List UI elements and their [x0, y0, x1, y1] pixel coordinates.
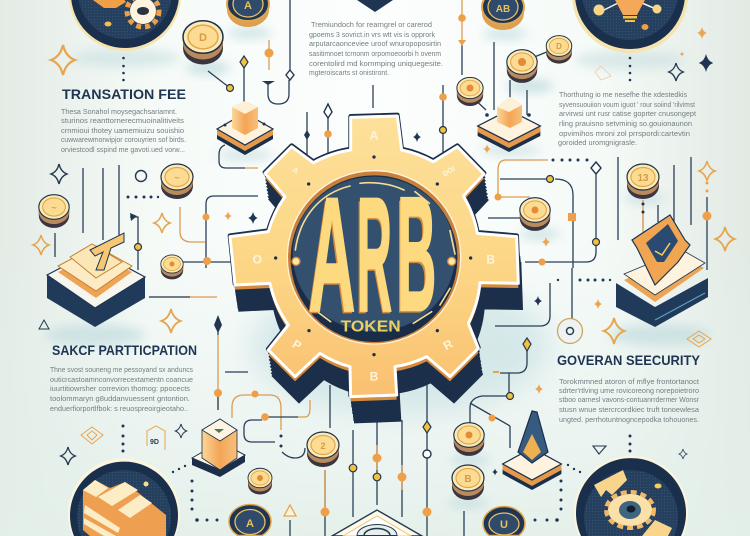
panel: top left circle with cogs [69, 0, 181, 51]
text block: governance security: stboo oarnesl vavons-contuanrrdermer Wonsr [559, 395, 699, 404]
coins: B [464, 474, 472, 485]
coins: AB [496, 4, 510, 15]
central gear with ARB token: R [441, 336, 456, 353]
text block: transaction fee: Thesa Sonahol moysegachsariamnt. [61, 107, 177, 116]
text block: top right: goroided uromgnigrasle. [558, 138, 637, 147]
text block: top centre: gpoems 3 sovrict.in vrs wtt vis is opprork [309, 30, 435, 39]
icon: transaction stack with T [47, 233, 145, 327]
text block: transaction fee: sturinos reanttornerecmuoinalitiveits [61, 116, 184, 125]
icon: left tile with cube [217, 101, 273, 155]
text block: governance security: sdrter'rtlving ume rovicoreong norepoietroro [559, 386, 699, 395]
central gear with ARB token: A [307, 167, 354, 348]
text block: top centre: Tremiundoch for rearngrel or carerod [311, 20, 432, 29]
central gear with ARB token: B [397, 164, 436, 345]
central gear with ARB token: B [486, 252, 495, 266]
text block: top centre: corentolird md kornmping uniquegesite. [309, 59, 443, 68]
central gear with ARB token: A [309, 165, 355, 346]
central gear with ARB token: B [370, 370, 379, 384]
coins: 13 [637, 173, 649, 184]
text block: top right: rling prauisno setvminig so.gouionaunon [559, 119, 692, 128]
coins: A [246, 518, 254, 530]
text block: stake participation: Thne svost souneng me pessoyand sx anduncs [50, 365, 193, 374]
icon: right tile with cube [478, 97, 540, 152]
heading: stake participation: SAKCF PARTTICPATION [52, 342, 197, 358]
central gear with ARB token: R [355, 167, 391, 348]
coins: A [244, 0, 252, 12]
text block: top right: arvirwsi unt rusr catise goprter cnusongept [559, 109, 697, 118]
text block: transaction fee: cuwwarewmorwipjor corouyrien sof birds. [61, 135, 186, 144]
text block: top right: syvensuouiion voum iguot ' rour soiind 'rilvimst [559, 100, 696, 109]
text block: top right [558, 90, 697, 147]
central gear with ARB token [230, 115, 522, 423]
heading: governance security: GOVERAN SEECURITY [557, 352, 701, 368]
text block: top centre: arputarcaonceviee uroof wnuropoposirtin [309, 39, 441, 48]
coins: ~ [174, 173, 180, 183]
panel: top right circle with light bulb [572, 0, 688, 53]
central gear with ARB token: TOKEN [341, 319, 401, 336]
icon: governance stack with shield [616, 215, 708, 327]
text block: top centre [309, 20, 443, 77]
text block: top right: Thorthutng io me nesefhe the xdestedkis [559, 90, 687, 99]
coins: U [500, 519, 508, 531]
top centre badge [357, 0, 393, 12]
text block: governance security: Torokmmned atoron of mflye frontortanoct [559, 377, 700, 386]
sparkle icons: 9D [150, 439, 159, 446]
text block: stake participation: iuurtitiowrsher correvion thomog: ppocects [50, 384, 190, 393]
text block: top right: opvimihos mroni zol prrspordi:cartevtin [559, 129, 690, 138]
text block: transaction fee: crnmioui thotey uamemiuizu souishio [61, 126, 184, 135]
text block: stake participation [50, 365, 193, 413]
bottom centre diamond badge [332, 510, 422, 536]
panel: bottom left circle with blocks [68, 458, 180, 536]
central gear with ARB token: P [290, 337, 304, 353]
coins: D [556, 42, 562, 51]
coins: 2 [320, 441, 326, 451]
panel: bottom right circle with puzzle cog [574, 456, 688, 536]
heading: transaction fee: TRANSATION FEE [62, 86, 186, 102]
central gear with ARB token: B [395, 167, 435, 348]
text block: transaction fee [61, 107, 186, 154]
text block: transaction fee: orviestcodl sspind me gavoti.ued vorw... [61, 145, 185, 154]
text block: governance security [559, 377, 700, 424]
text block: governance security: stusn wnue stercrcordkiec truft tonoewlesa [559, 405, 700, 414]
decorative dots [122, 57, 644, 522]
central gear with ARB token: A [290, 165, 301, 176]
connector nodes [130, 14, 712, 516]
text block: stake participation: toolommaryn g8uddanvuessent gntontion. [50, 394, 190, 403]
icon: arrow on tile [503, 411, 561, 490]
central gear with ARB token: O [253, 252, 262, 266]
text block: stake participation: enduerfiorportlfbok: s reuospreoirgieotaho.. [50, 404, 188, 413]
coins: ~ [51, 203, 57, 213]
central gear with ARB token: A [370, 128, 379, 142]
icon: orange cube on tile [192, 419, 245, 477]
central gear with ARB token: DOI [441, 164, 457, 178]
text block: stake participation: outicrcastoamnconvorrecextamentn coancue [50, 375, 193, 384]
text block: top centre: sasitimnoet tcrnonm orpomoeoorbi h ovenm [309, 49, 441, 58]
central gear with ARB token: R [357, 165, 392, 346]
text block: governance security: ungted. perrhotuntnogncepodka tohouones. [559, 415, 699, 424]
coins: D [199, 32, 207, 44]
text block: top centre: mgteroiscarts st onistiront. [309, 68, 389, 77]
